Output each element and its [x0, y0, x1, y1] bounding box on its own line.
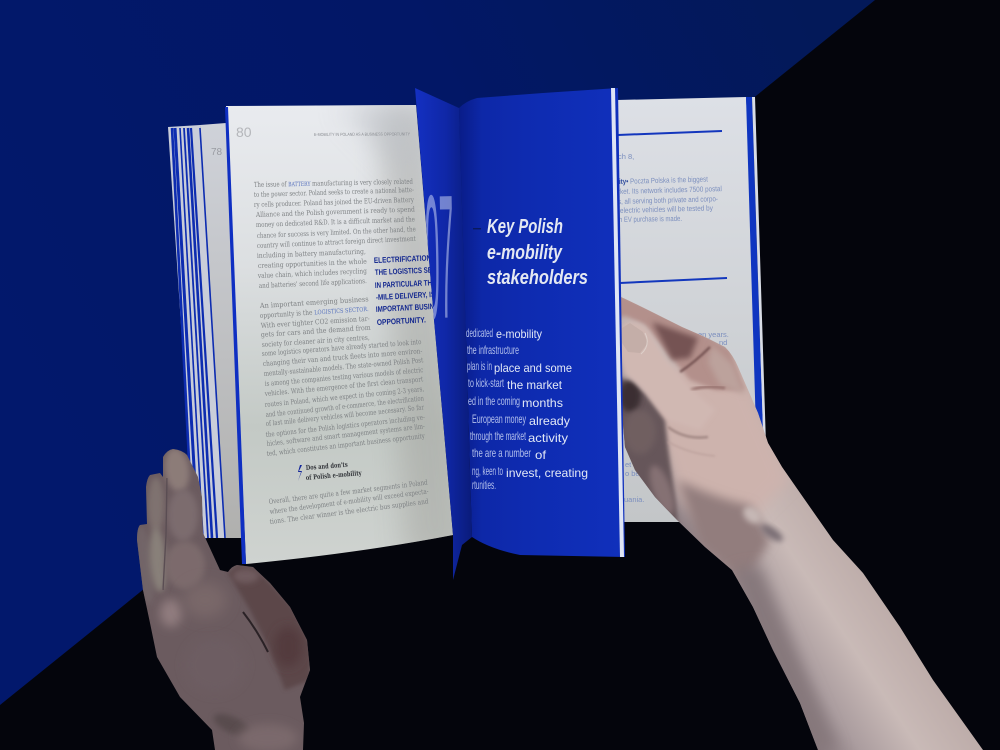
left hand — [137, 449, 310, 750]
body copy: including in battery manufacturing, — [257, 248, 366, 260]
body copy: to the power sector. Poland seeks to create a national batte- — [254, 186, 414, 199]
body copy: vehicles. With the emergence of the first clean transport — [264, 375, 424, 398]
chapter introduction: place and some — [494, 361, 572, 375]
body copy: opportunity is the LOGISTICS SECTOR. — [260, 305, 369, 320]
body copy: some logistics operators have already started to look into — [262, 338, 422, 358]
wrist vein shadow — [758, 521, 786, 545]
chapter introduction: ng, keen to — [472, 464, 503, 478]
web crease — [680, 347, 710, 372]
link text: of Polish e-mobility — [305, 469, 363, 482]
body copy: and the continued growth of e-commerce, the electrification — [265, 394, 425, 419]
body copy: ted, which constitutes an important business opportunity — [266, 432, 425, 458]
chapter title: Key Polish — [487, 216, 563, 238]
blue fore-edge band — [746, 97, 763, 430]
link icon: bolt — [298, 465, 302, 481]
pull quote: OPPORTUNITY. — [377, 315, 426, 327]
chapter introduction: invest, creating — [506, 466, 588, 480]
body copy: society for cleaner air in city centres, — [262, 334, 370, 349]
body copy — [254, 178, 429, 526]
lower hand shadow — [678, 480, 770, 585]
body copy: ry cells producer. Poland has joined the EU-driven Battery — [254, 196, 414, 209]
knuckle highlight — [160, 599, 182, 627]
pull quote: ELECTRIFICATION OF — [374, 253, 442, 265]
body copy: With ever tighter CO2 emission tar- — [261, 315, 370, 330]
chapter introduction: plan is in — [467, 359, 492, 373]
right page text: n EV purchase is made. — [619, 214, 682, 224]
right page text — [618, 152, 729, 504]
middle finger — [163, 449, 191, 492]
running header: E-MOBILITY IN POLAND AS A BUSINESS OPPORTUNITY — [314, 131, 410, 137]
body copy: of last mile delivery vehicles will become necessary. So far — [265, 403, 425, 428]
chapter title: stakeholders — [487, 267, 588, 289]
body copy: chance for success is very limited. On the other hand, the — [257, 225, 416, 240]
palm tone — [655, 374, 792, 511]
right page text: o becon — [625, 469, 652, 478]
right page text: ity• Poczta Polska is the biggest — [619, 174, 709, 186]
rule lines — [618, 131, 727, 283]
body copy: tions. The clear winner is the electric bus supplies and — [269, 497, 429, 526]
body copy: is among the companies testing various models of electric — [264, 366, 424, 388]
chapter introduction: the market — [507, 378, 563, 392]
back of hand — [185, 637, 245, 693]
chapter introduction: ed in the coming — [468, 394, 520, 408]
chapter introduction: the infrastructure — [467, 343, 519, 357]
thumb nail — [622, 324, 646, 353]
right page text: rket. Its network includes 7500 postal — [618, 184, 722, 196]
body copy: changing their van and truck fleets into more environ- — [263, 347, 423, 368]
thumb — [228, 565, 310, 690]
chapter introduction: e-mobility — [496, 327, 542, 341]
page right shading — [348, 105, 453, 544]
chapter introduction: to kick-start — [468, 376, 504, 390]
page number 78: 78 — [211, 147, 223, 158]
right page text: et r — [625, 460, 636, 469]
blue flap page with chapter number — [415, 88, 472, 580]
body copy: Overall, there are quite a few market segments in Poland — [268, 478, 428, 506]
link text — [305, 461, 363, 482]
body copy: The issue of BATTERY manufacturing is very closely related — [254, 178, 413, 189]
index finger — [621, 297, 745, 392]
chapter introduction: the are a number — [472, 446, 531, 460]
right page text: ch 8, — [618, 152, 634, 161]
title dash — [473, 228, 481, 229]
forearm lower shadow — [732, 565, 838, 750]
right page text: electric vehicles will be tested by — [620, 203, 713, 215]
body copy: value chain, which includes recycling — [257, 267, 367, 280]
fingers behind the page — [622, 376, 679, 522]
pinky finger — [137, 526, 151, 604]
palm creases — [668, 427, 708, 438]
white page edge stripe — [611, 88, 624, 557]
chapter title: e-mobility — [487, 242, 563, 264]
chapter introduction: European money — [472, 412, 526, 426]
blue chapter page — [459, 88, 625, 557]
thumb crease shadow — [243, 612, 268, 652]
left page of the book — [225, 100, 470, 564]
chapter introduction: already — [529, 414, 570, 428]
right page text: uania. — [624, 495, 644, 504]
chapter introduction: rtunities. — [472, 478, 496, 492]
right page text: s, all serving both private and corpo- — [618, 194, 718, 206]
chapter title — [487, 216, 588, 289]
page number 80: 80 — [236, 124, 252, 140]
pull quote: IN PARTICULAR THE LAST — [375, 277, 454, 290]
body copy: mentally-sustainable models. The state-owned Polish Post — [263, 356, 424, 378]
body copy: routes in Poland, which we expect in the coming 2-3 years, — [264, 385, 424, 409]
finger gaps — [163, 478, 167, 590]
chapter introduction: activity — [528, 431, 568, 445]
ring finger — [148, 477, 164, 533]
chapter introduction — [466, 326, 588, 492]
body copy: country will continue to attract foreign direct investment — [257, 235, 416, 250]
chapter introduction: of — [535, 448, 547, 462]
pull quote: THE LOGISTICS SECTOR, — [375, 265, 451, 277]
body copy: money on dedicated R&D. It is a difficult market and the — [256, 215, 415, 229]
body copy: the options for the Polish logistics operators including ve- — [265, 413, 426, 439]
body copy: and batteries' second life applications. — [259, 277, 367, 290]
chapter number 07: 07 — [423, 158, 456, 356]
body copy: Alliance and the Polish government is ready to spend — [255, 205, 415, 219]
body copy: where the development of e-mobility will exceed expecta- — [269, 487, 429, 516]
right page text: nd — [719, 338, 727, 347]
chapter introduction: through the market — [470, 429, 526, 443]
white page edge — [752, 97, 766, 445]
body copy: creating opportunities in the whole — [258, 258, 367, 270]
body copy: gets for cars and the demand from — [261, 324, 371, 339]
wrist shade — [214, 714, 246, 734]
pull quote — [374, 253, 454, 327]
link text: Dos and don'ts — [306, 461, 348, 472]
pull quote: -MILE DELIVERY, IS AN — [376, 289, 446, 302]
blue page edges — [172, 128, 225, 538]
pull quote: IMPORTANT BUSINESS — [376, 301, 448, 314]
left book page stack — [168, 123, 243, 538]
body copy: hicles, software and smart management systems are lim- — [266, 422, 426, 448]
chapter introduction: months — [522, 396, 563, 410]
right page of the book — [617, 97, 766, 522]
blue spine edge — [225, 107, 246, 564]
right page text: en years. — [698, 330, 729, 339]
body copy: An important emerging business — [259, 295, 369, 310]
right hand and forearm — [610, 290, 1000, 750]
thumb — [622, 323, 695, 419]
chapter introduction: dedicated — [466, 326, 493, 340]
